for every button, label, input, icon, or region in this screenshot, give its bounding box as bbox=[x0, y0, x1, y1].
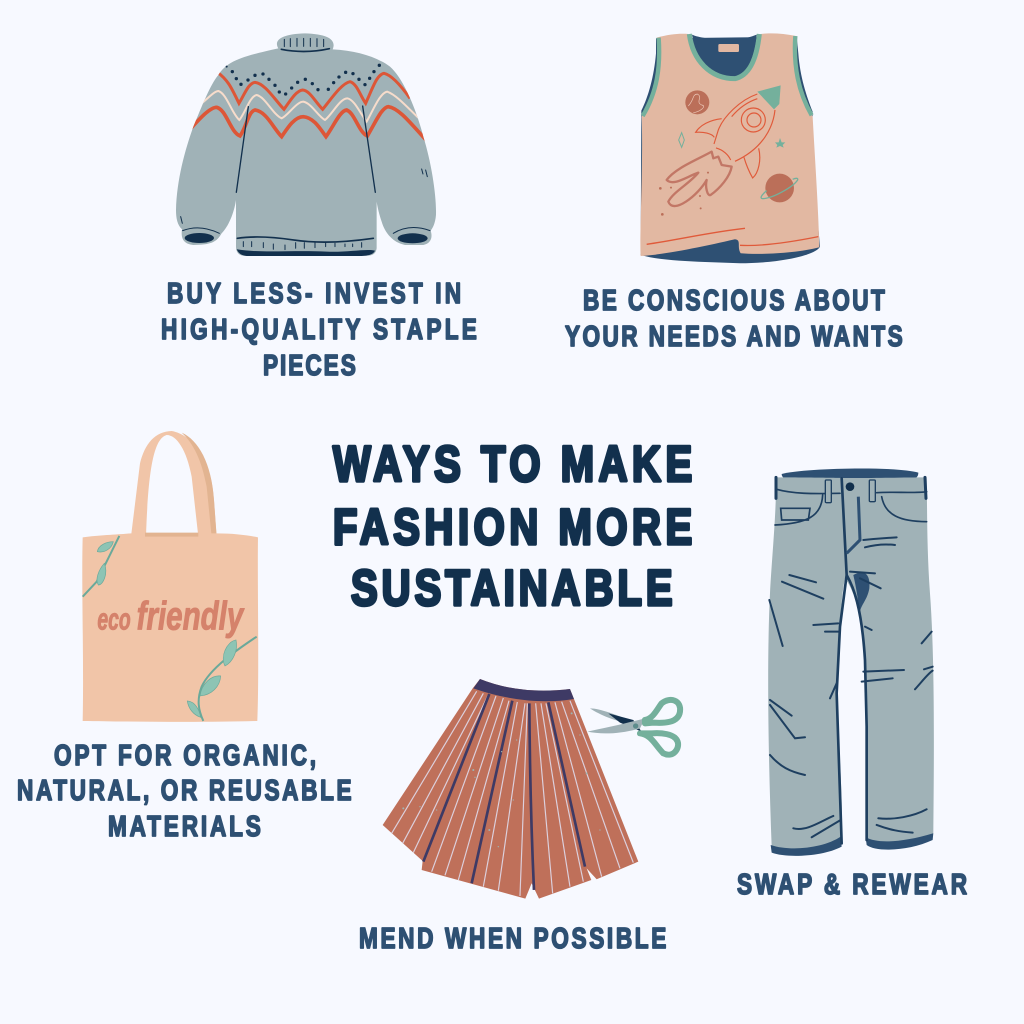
title: FASHION MORE bbox=[333, 499, 692, 555]
caption: buy less: BUY LESS- INVEST IN bbox=[167, 276, 461, 310]
caption: opt for organic bbox=[17, 738, 352, 843]
caption: be conscious bbox=[565, 283, 903, 353]
caption: opt for organic: OPT FOR ORGANIC, bbox=[54, 738, 316, 772]
icon: eco friendly tote bag: eco bbox=[97, 602, 131, 636]
title bbox=[333, 436, 692, 616]
icon: tank top with rocket bbox=[640, 33, 820, 263]
caption: buy less: PIECES bbox=[263, 348, 356, 382]
caption: buy less bbox=[161, 276, 477, 382]
icon: sweater bbox=[176, 33, 436, 256]
caption: opt for organic: NATURAL, OR REUSABLE bbox=[17, 773, 352, 807]
icon: eco friendly tote bag: friendly bbox=[137, 594, 245, 638]
caption: be conscious: YOUR NEEDS AND WANTS bbox=[565, 319, 903, 353]
title: WAYS TO MAKE bbox=[333, 436, 692, 492]
caption: buy less: HIGH-QUALITY STAPLE bbox=[161, 312, 477, 346]
caption: mend: MEND WHEN POSSIBLE bbox=[359, 921, 666, 955]
icon: eco friendly tote bag bbox=[82, 431, 258, 722]
icon: scissors bbox=[587, 700, 680, 755]
icon: jeans bbox=[768, 469, 934, 856]
caption: swap and rewear: SWAP & REWEAR bbox=[737, 867, 967, 901]
caption: opt for organic: MATERIALS bbox=[108, 809, 261, 843]
icon: pleated skirt bbox=[383, 679, 680, 899]
caption: be conscious: BE CONSCIOUS ABOUT bbox=[583, 283, 885, 317]
title: SUSTAINABLE bbox=[351, 560, 673, 616]
